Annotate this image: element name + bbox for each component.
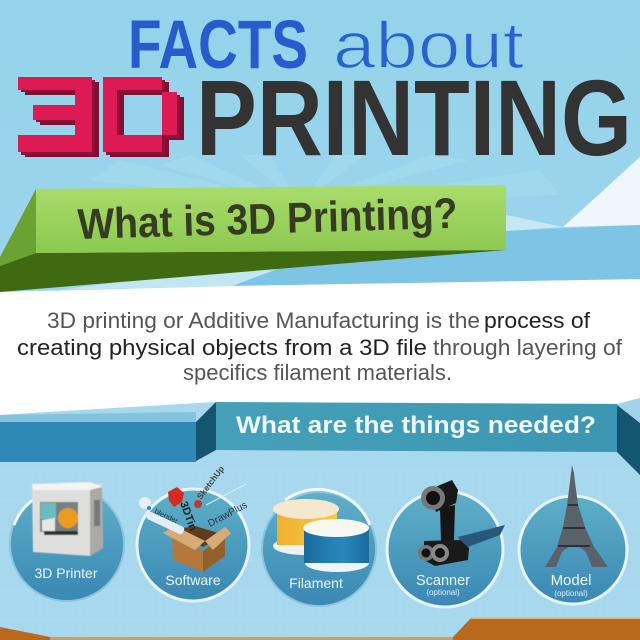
- icon: box with software logos: blender: [153, 507, 180, 526]
- icon: scanner: [418, 480, 505, 566]
- icon: printer: [32, 482, 103, 556]
- item: software: [137, 464, 249, 601]
- white text band: [0, 279, 640, 415]
- sky background: [0, 0, 640, 300]
- icon: box with software logos: 3DTin: [177, 500, 199, 533]
- title: FACTS about: [128, 6, 524, 83]
- title: FACTS about: about: [333, 8, 524, 82]
- definition paragraph: [17, 308, 623, 385]
- title: FACTS about: FACTS: [128, 6, 308, 83]
- icon: box with software logos: DrawPlus: [206, 500, 249, 530]
- item: 3D printer: [10, 482, 124, 601]
- orange ground: [0, 617, 640, 640]
- definition paragraph: process of: [484, 308, 591, 333]
- definition paragraph: specifics filament materials.: [183, 360, 452, 385]
- icon: Eiffel tower: [545, 465, 608, 567]
- teal banner: What are the things needed?: [0, 398, 640, 475]
- item: model: (optional): [554, 589, 588, 598]
- definition paragraph: 3D printing or Additive Manufacturing is the: [47, 308, 480, 333]
- item: model: [519, 465, 627, 604]
- label: Scanner: [416, 573, 470, 589]
- definition paragraph: through layering of: [433, 335, 623, 360]
- label: Software: [165, 572, 221, 588]
- lower background: [0, 402, 640, 640]
- definition paragraph: creating physical objects from a 3D file: [17, 335, 427, 360]
- icon: box with software logos: [139, 464, 249, 572]
- title: 3D logo: [18, 77, 184, 157]
- label: Filament: [289, 575, 343, 591]
- label: Model: [551, 572, 591, 589]
- icon: box with software logos: SketchUp: [195, 464, 226, 501]
- teal banner: What are the things needed?: What are the things needed?: [236, 412, 596, 439]
- mountains: [60, 157, 640, 290]
- item: filament: [262, 489, 376, 606]
- item: scanner: [387, 480, 505, 607]
- label: 3D Printer: [34, 565, 98, 581]
- green banner: What is 3D Printing?: [0, 185, 506, 292]
- icon: blue spool: [303, 519, 369, 572]
- icon: yellow spool: [273, 499, 339, 555]
- item: scanner: (optional): [426, 588, 460, 597]
- green banner: What is 3D Printing?: What is 3D Printing?: [77, 190, 458, 249]
